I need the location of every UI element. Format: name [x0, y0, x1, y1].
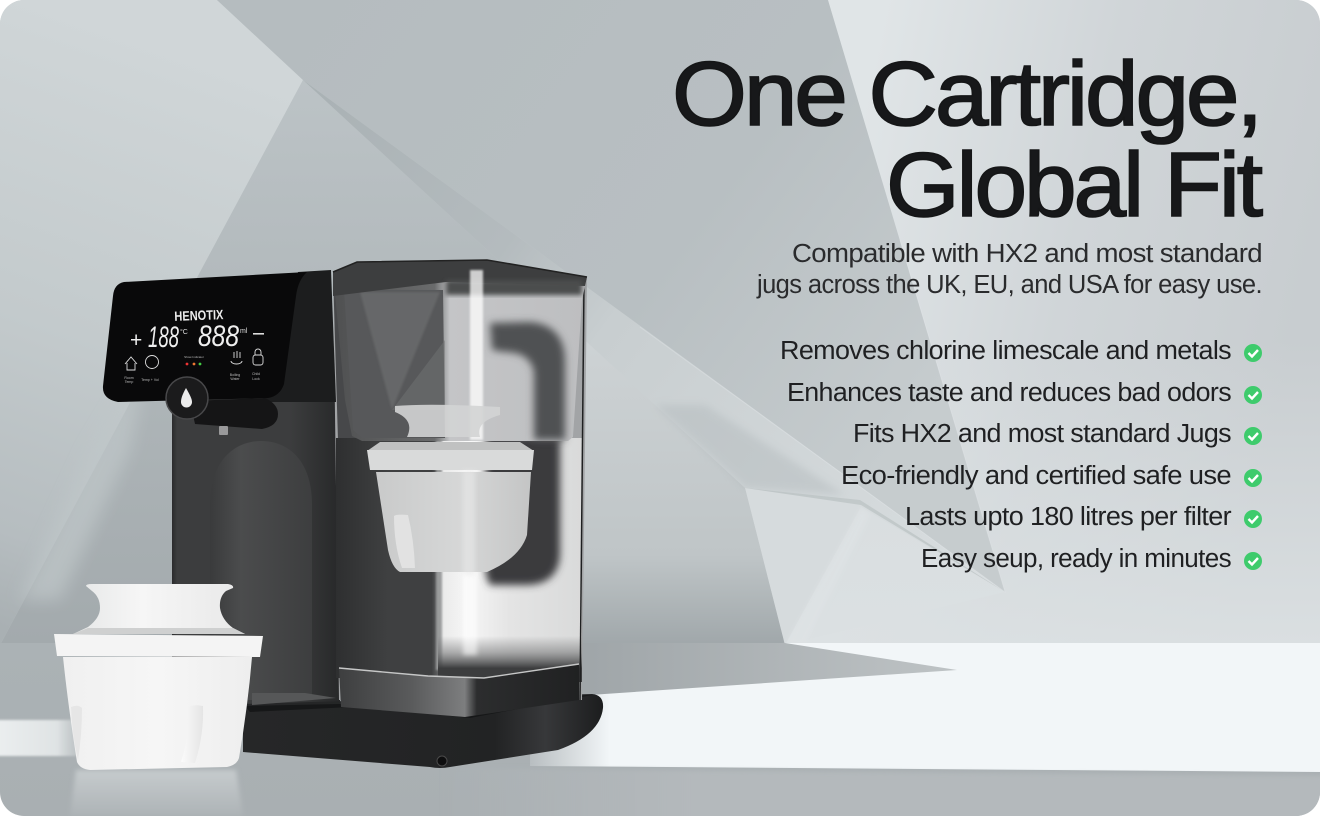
background: geometric wall: [0, 0, 1320, 650]
touch icons: [125, 357, 137, 370]
title: Global Fit: [886, 135, 1263, 236]
icon captions: Room: [124, 376, 134, 380]
feature 4: Eco-friendly and certified safe use: [841, 462, 1231, 490]
control panel: Child: [252, 372, 260, 376]
cartridge flange: [54, 634, 263, 657]
base foot hole: [437, 756, 447, 766]
dispenser recess arch: [228, 441, 312, 700]
feature 5: Lasts upto 180 litres per filter: [905, 503, 1232, 531]
control panel: Show Indicator: [184, 355, 204, 359]
status lights: [186, 363, 188, 365]
cartridge grips: [196, 706, 203, 755]
water dispenser machine: [103, 260, 603, 768]
feature 2: Enhances taste and reduces bad odors: [787, 379, 1231, 407]
filter jug upper: [333, 260, 587, 441]
tank outer shell: [333, 272, 587, 700]
control panel: Water: [230, 377, 240, 381]
dispense button with water drop: [166, 377, 208, 419]
volume display: 888: [198, 320, 239, 353]
jug handle lower: [486, 436, 560, 585]
cartridge vents: [73, 628, 245, 634]
dispenser body column: [172, 395, 340, 707]
spout arm: [190, 398, 278, 429]
cartridge neck: [73, 584, 245, 634]
jug highlight: [470, 270, 483, 440]
control panel: ml: [240, 328, 248, 335]
jug dark rim band: [333, 260, 587, 296]
drip tray: [252, 693, 336, 705]
standalone filter cartridge: [54, 584, 263, 770]
cartridge inside jug: [367, 405, 534, 575]
control panel: 188: [148, 321, 179, 354]
feature list: [780, 337, 1262, 573]
control panel: [103, 272, 307, 402]
brand name: HENOTIX: [174, 307, 224, 324]
dispenser base: [243, 694, 603, 768]
cartridge reflection: [73, 768, 240, 808]
control panel: Boiling: [230, 373, 240, 377]
control panel: Lock: [252, 377, 260, 381]
subtitle: Compatible with HX2 and most standard: [792, 240, 1262, 268]
feature 1: Removes chlorine limescale and metals: [780, 337, 1231, 365]
control panel: Temp: [125, 380, 133, 384]
title: [676, 58, 1264, 218]
right copy block: [672, 44, 1263, 573]
water tank base ring: [339, 664, 579, 717]
jug handle upper: [490, 322, 565, 440]
subtitle: [756, 240, 1262, 299]
title: One Cartridge,: [672, 44, 1260, 145]
water tank lower: [336, 436, 582, 682]
cartridge body: [63, 657, 252, 770]
control panel: Temp + Vol: [141, 378, 159, 382]
temperature display: +: [130, 329, 142, 352]
jug spout: [394, 290, 445, 438]
spout nozzle: [219, 426, 228, 435]
side of control head: [262, 270, 336, 402]
background: floor with light reflections: [0, 643, 1320, 816]
feature 3: Fits HX2 and most standard Jugs: [853, 420, 1231, 448]
feature 6: Easy seup, ready in minutes: [921, 545, 1231, 573]
control panel: °C: [180, 328, 188, 336]
subtitle: jugs across the UK, EU, and USA for easy use.: [756, 271, 1262, 299]
